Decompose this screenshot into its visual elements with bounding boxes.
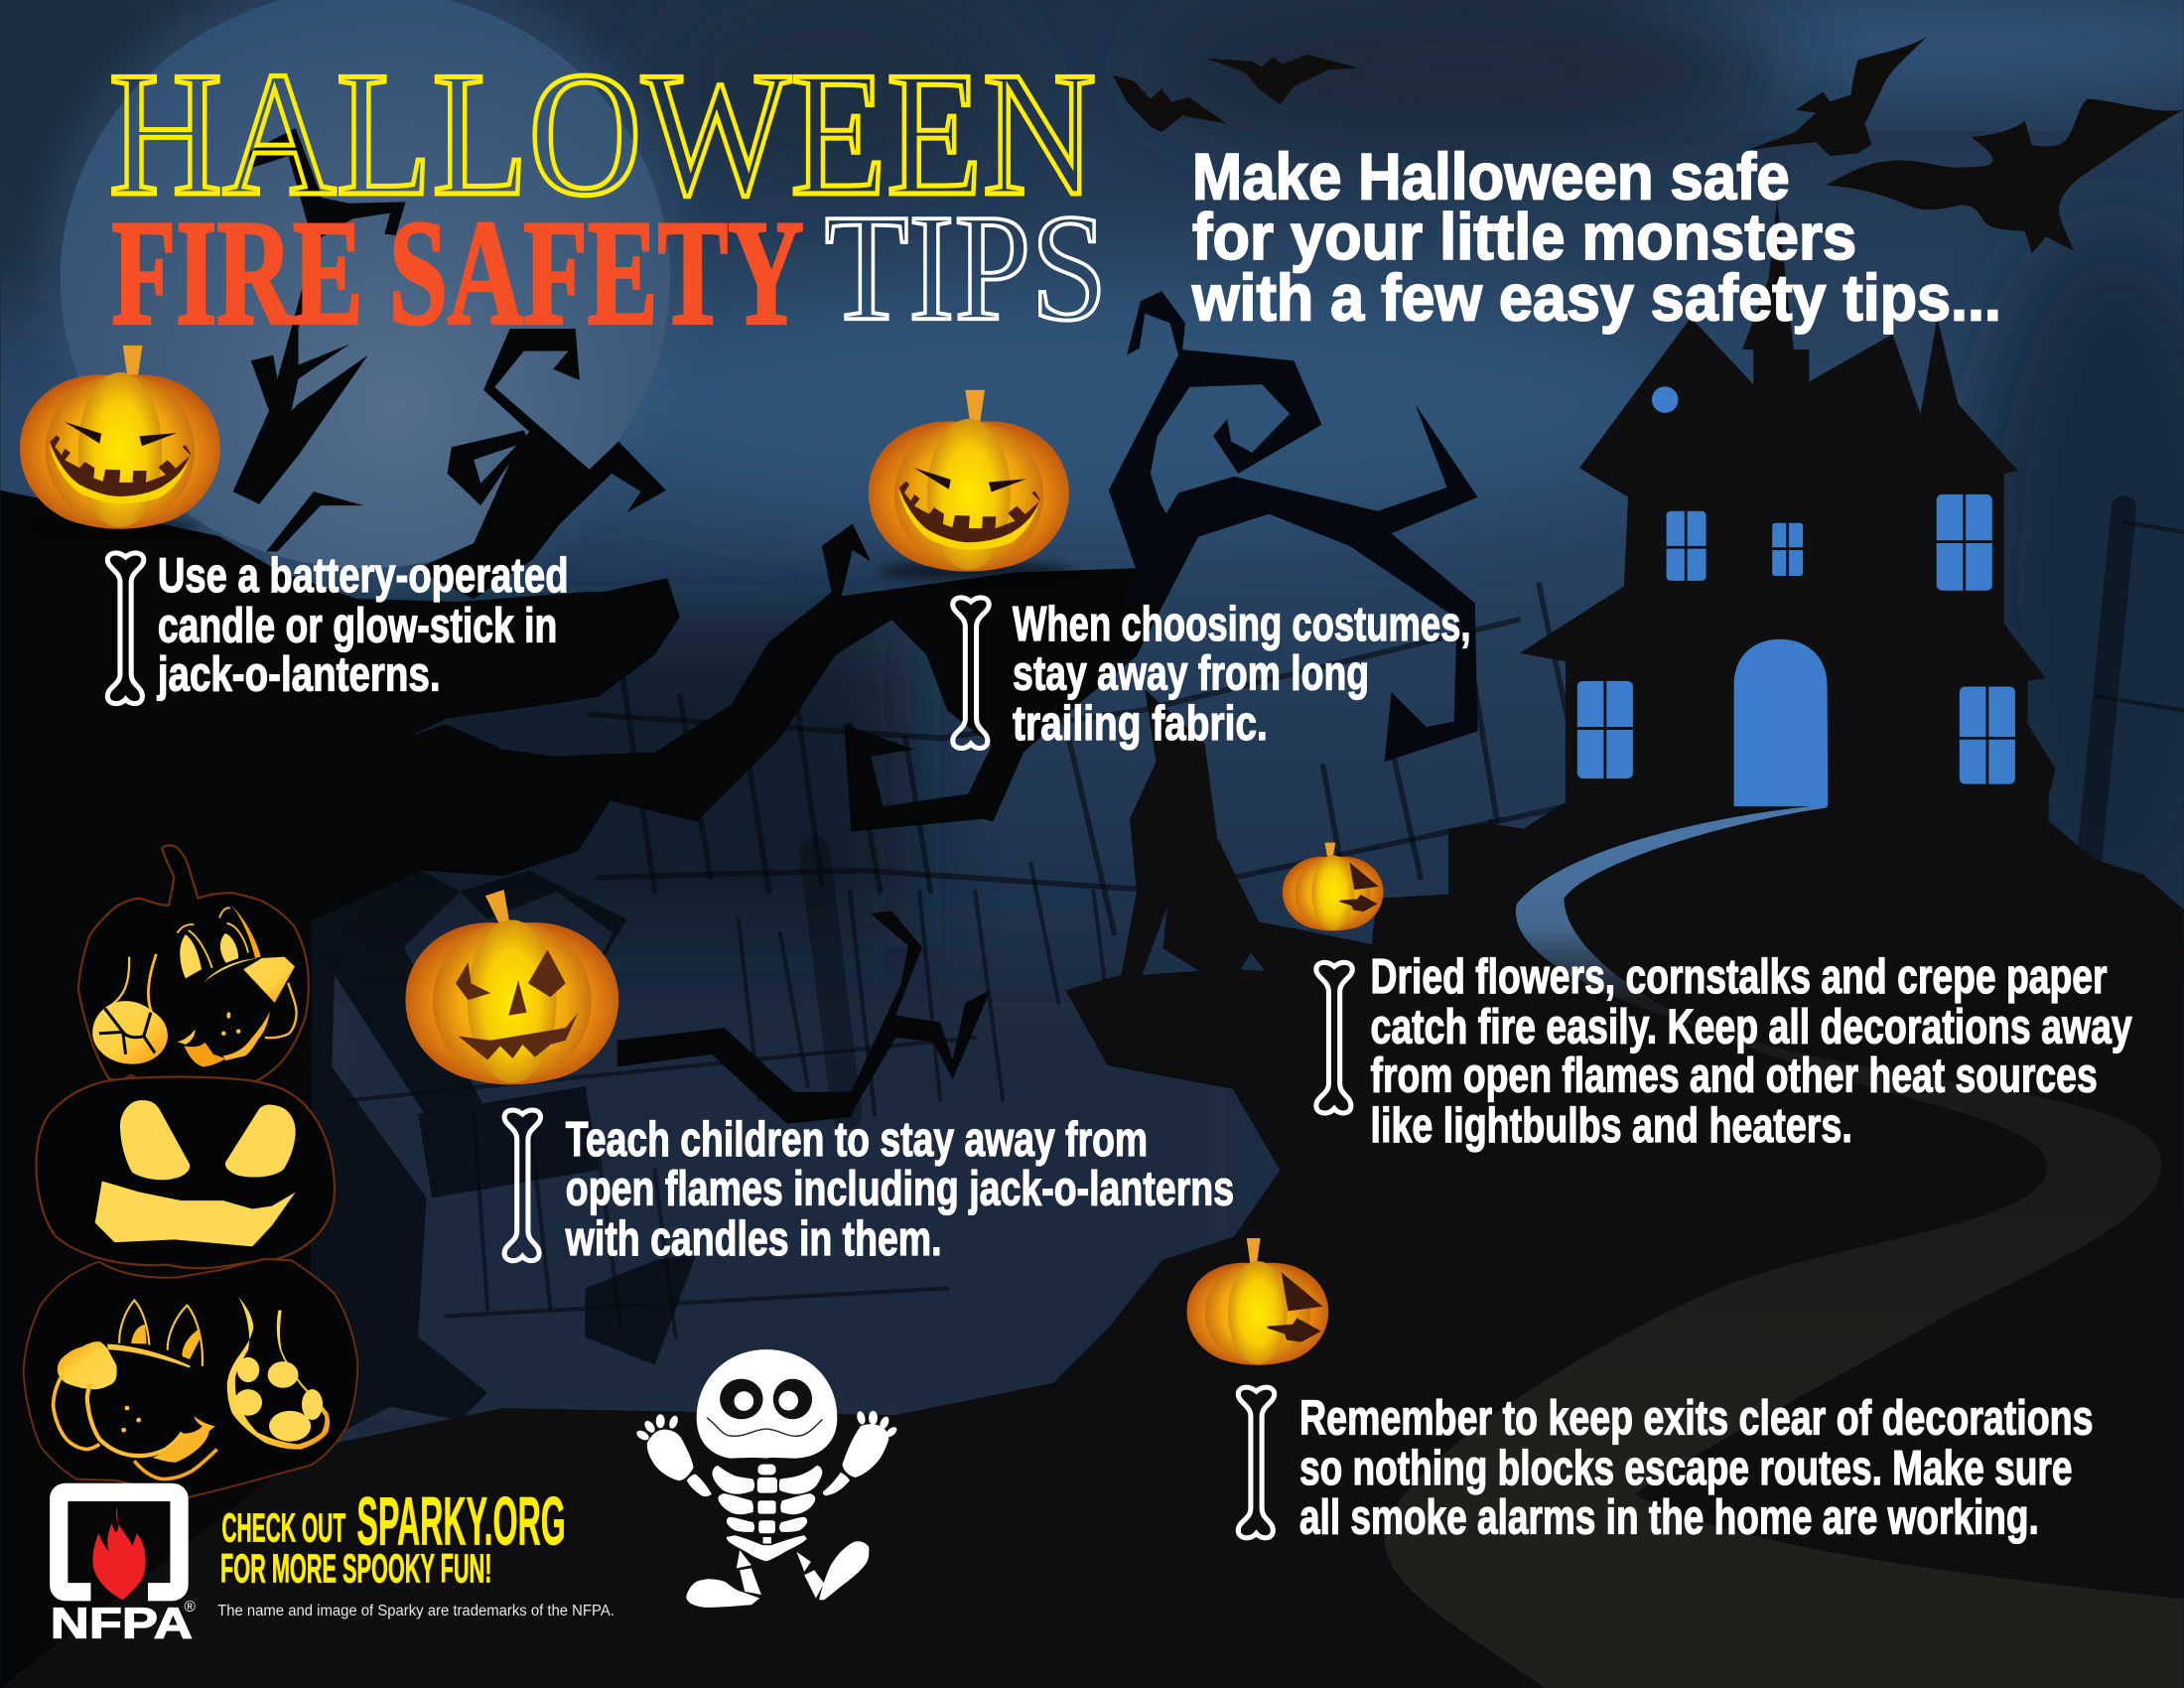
call to action: Sparky.org: FOR MORE SPOOKY FUN! (220, 1545, 491, 1591)
logo: NFPA: ® (184, 1599, 196, 1616)
trademark note: The name and image of Sparky are trademarks of the NFPA. (217, 1603, 614, 1619)
pumpkin four (1283, 843, 1384, 931)
icon: fence post cap (559, 663, 587, 691)
tip two: costumes: trailing fabric. (1013, 697, 1268, 751)
silhouette: curly tree (415, 329, 666, 599)
tip one: jack-o-lantern candles: candle or glow-stick in (158, 600, 557, 653)
silhouette: curved branch near pumpkin three (617, 911, 991, 1124)
carved pumpkin: bottom (24, 1259, 357, 1497)
tip two: costumes (953, 598, 1471, 751)
house windows and door (1577, 386, 2015, 806)
carved pumpkin: top (78, 845, 309, 1094)
moon (37, 0, 694, 594)
heading: intro text (1191, 140, 2001, 335)
tip five: exits and smoke alarms (1238, 1387, 2093, 1544)
tip one: jack-o-lantern candles: jack-o-lanterns. (157, 648, 441, 702)
pumpkin three (405, 890, 618, 1084)
tip one: jack-o-lantern candles: Use a battery-operated (158, 549, 569, 603)
silhouette: faded lower tree (310, 871, 697, 1449)
title: HALLOWEEN: HALLOWEEN (109, 35, 1096, 232)
tip one: jack-o-lantern candles (107, 549, 569, 704)
text: SPARKY.ORG (356, 1483, 566, 1560)
icon: large bat (1826, 99, 2184, 253)
tip three: open flames: open flames including jack-o-lanterns (566, 1162, 1234, 1215)
background: sky gaps in cat silhouette (1142, 907, 1265, 975)
icon: small bat (1113, 75, 1227, 132)
tip three: open flames (504, 1110, 1234, 1266)
heading: intro text: with a few easy safety tips... (1191, 261, 2001, 335)
tip three: open flames: Teach children to stay away from (566, 1113, 1148, 1167)
silhouette: foreground hill, cat and urn (0, 689, 2184, 1688)
carved pumpkin stack (24, 845, 357, 1497)
tip four: decorations (1316, 950, 2132, 1153)
skeleton Sparky mascot (635, 1349, 898, 1608)
pumpkin five (1187, 1238, 1328, 1365)
pumpkin two (869, 390, 1072, 581)
silhouette: upper left tree (233, 128, 405, 551)
logo: NFPA (51, 1492, 196, 1648)
silhouette: right twisted tree (1109, 291, 1478, 762)
silhouette: haunted house (1520, 200, 2056, 836)
call to action: Sparky.org: CHECK OUT (221, 1505, 345, 1551)
heading: intro text: Make Halloween safe (1192, 140, 1790, 213)
icon: upper right bat (1746, 36, 1928, 156)
icon: red flame (92, 1507, 146, 1600)
winding road (1385, 805, 2184, 1688)
carved pumpkin: middle (36, 1077, 335, 1268)
tip two: costumes: stay away from long (1013, 646, 1369, 700)
background: dim graveyard fence (348, 508, 2184, 1337)
tip two: costumes: When choosing costumes, (1013, 598, 1471, 651)
heading: intro text: for your little monsters (1192, 200, 1856, 273)
title: TIPS: TIPS (825, 184, 1107, 352)
logo: NFPA: NFPA (51, 1601, 193, 1648)
tip four: decorations: like lightbulbs and heaters. (1371, 1099, 1852, 1153)
icon: middle bat (1206, 55, 1359, 104)
tip three: open flames: with candles in them. (565, 1212, 942, 1266)
call to action: Sparky.org (220, 1483, 566, 1591)
pumpkin one (20, 346, 220, 535)
title: FIRE SAFETY: FIRE SAFETY (112, 189, 804, 355)
silhouette: left dark tree mass and hill (0, 491, 1198, 1688)
